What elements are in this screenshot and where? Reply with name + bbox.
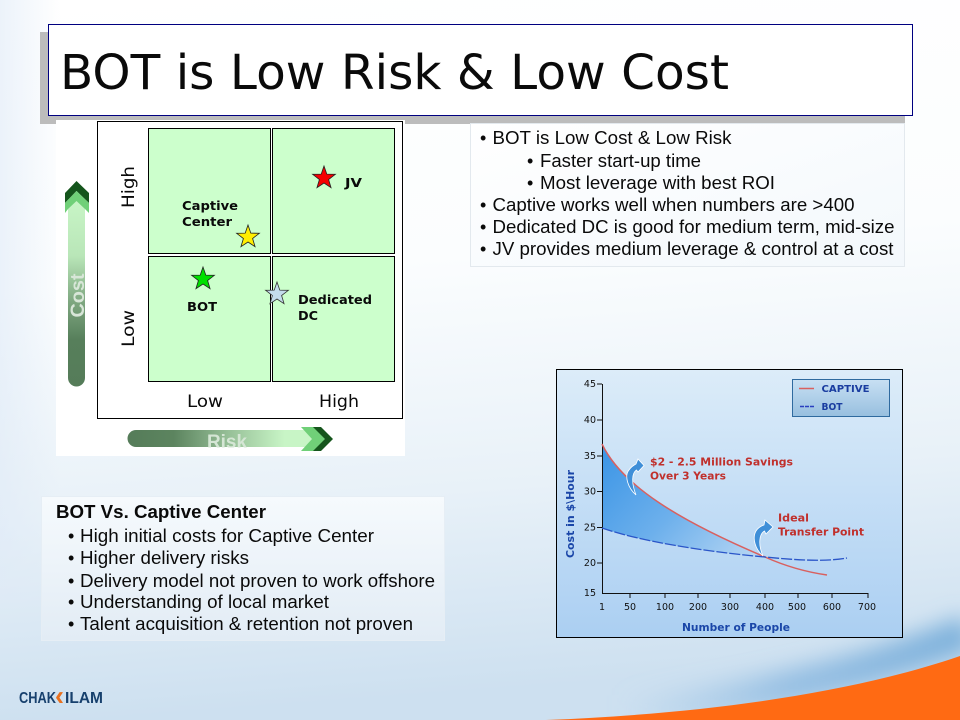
comparison bullets: • [68,592,74,612]
y axis ticks: 40 [584,415,596,426]
arrow: cost axis [65,181,89,386]
star: dedicated DC [266,282,288,304]
chart: cost vs number of people [556,370,902,638]
captive curve [602,444,827,575]
legend: BOT [822,402,843,413]
key points text: • [480,239,486,259]
x axis ticks: 400 [756,602,774,613]
key points text: BOT is Low Cost & Low Risk [492,128,733,148]
x axis ticks: 200 [689,602,707,613]
x axis ticks: 500 [788,602,806,613]
panel: BOT vs captive center [42,496,444,640]
key points text: JV provides medium leverage & control at a cost [492,239,894,259]
comparison bullets: Delivery model not proven to work offshore [80,571,435,591]
key points text: • [480,128,486,148]
y axis ticks: 15 [584,588,596,599]
key points text: • [480,217,486,237]
savings callout: Over 3 Years [650,470,726,482]
y axis ticks: 35 [584,451,596,462]
savings shaded area [602,444,765,557]
logo [19,680,103,711]
axis titles: Cost in $\Hour [564,469,577,558]
x axis ticks: 700 [858,602,876,613]
quadrant labels [182,176,372,323]
comparison bullets: High initial costs for Captive Center [80,526,374,546]
comparison bullets: • [68,571,74,591]
chart: cost vs number of people: Number of People [682,621,790,634]
panel: key points [470,124,904,266]
y axis ticks: 45 [584,379,596,390]
savings callout [650,456,793,482]
arrow: cost axis: Cost [68,273,89,318]
comparison bullets: • [68,548,74,568]
arrow: risk axis: Risk [207,432,247,453]
quadrant labels: BOT [187,300,218,314]
transfer point callout [778,512,864,538]
axis labels: High [119,166,139,208]
star: BOT [192,267,214,289]
title: BOT is Low Risk & Low Cost [60,45,729,101]
key points text: • [480,195,486,215]
key points text: • [527,151,533,171]
key points text: Captive works well when numbers are >400 [492,195,854,215]
legend: CAPTIVE [822,384,870,395]
comparison bullets: Understanding of local market [80,592,329,612]
x axis ticks: 50 [624,602,636,613]
transfer point callout: Transfer Point [778,526,864,538]
star: captive center [237,225,259,247]
matrix quadrants [148,128,394,382]
logo: ILAM [65,690,103,707]
axis labels: High [319,392,359,412]
x axis ticks: 100 [656,602,674,613]
logo: CHAK [19,690,57,707]
axis labels: Low [119,310,139,347]
matrix frame [98,122,402,418]
arrow: risk axis [128,427,333,453]
legend [792,380,890,416]
axis labels [119,166,359,412]
quadrant labels: Captive [182,199,238,213]
comparison bullets: • [68,526,74,546]
y axis ticks [584,379,596,599]
y axis ticks: 30 [584,486,596,498]
axis labels: Low [187,392,223,412]
key points text: Dedicated DC is good for medium term, mid-size [492,217,894,237]
comparison bullets [68,526,435,634]
axes [597,384,868,598]
comparison bullets: • [68,614,74,634]
quadrant labels: JV [344,176,363,190]
savings callout: $2 - 2.5 Million Savings [650,456,793,468]
logo: ‹ [55,680,64,711]
quadrant labels: Dedicated [298,293,372,307]
quadrant labels: Center [182,215,232,229]
panel heading: BOT Vs. Captive Center [56,502,266,522]
comparison bullets: Talent acquisition & retention not proven [80,614,413,634]
title shadow [40,32,905,124]
orange corner swoosh [546,656,960,720]
quadrant labels: DC [298,309,318,323]
panel: risk cost matrix [56,120,405,456]
comparison bullets: Higher delivery risks [80,548,249,568]
key points text [480,128,894,259]
key points text: Most leverage with best ROI [540,173,775,193]
icon: savings curved arrow [627,459,644,495]
title [48,24,912,116]
BOT curve [602,528,847,560]
x axis ticks: 300 [721,602,739,613]
icon: transfer point curved arrow [754,520,773,556]
star: JV [313,166,335,188]
y axis ticks: 20 [584,558,596,569]
x axis ticks: 600 [823,602,841,613]
transfer point callout: Ideal [778,512,809,524]
x axis ticks: 1 [599,602,605,613]
key points text: • [527,173,533,193]
x axis ticks [599,602,876,613]
key points text: Faster start-up time [540,151,701,171]
y axis ticks: 25 [584,522,596,534]
